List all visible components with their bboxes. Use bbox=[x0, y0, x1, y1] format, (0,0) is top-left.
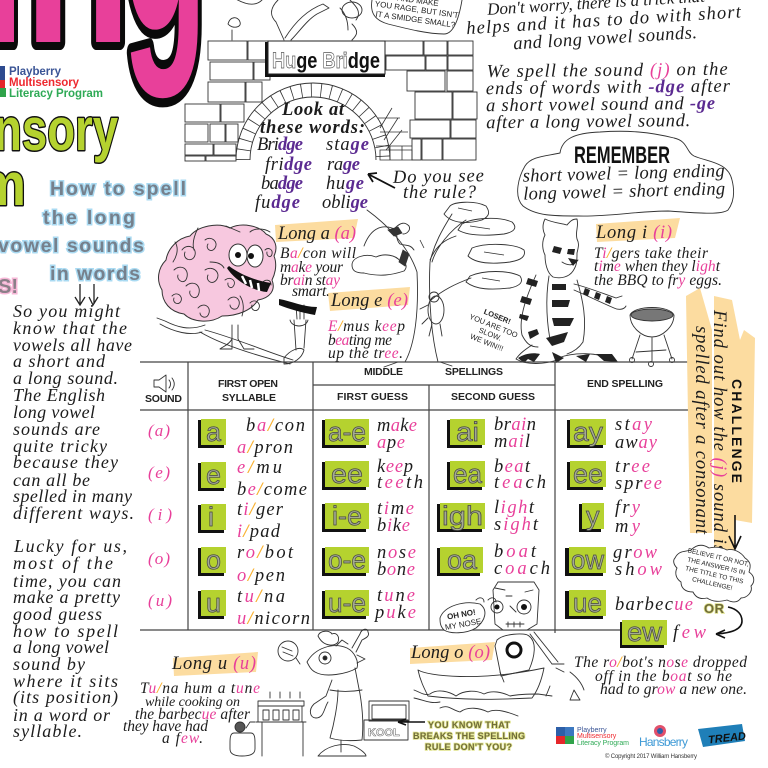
column: end spelling words: fry bbox=[615, 498, 641, 518]
text: you know that breaks the spelling rule bbox=[413, 720, 525, 752]
callout: believe it or not: BELIEVE IT OR NOT, bbox=[687, 547, 750, 568]
text: long a sentence: make your bbox=[280, 259, 344, 276]
text: look at these words: these words: bbox=[260, 118, 365, 138]
table header: sound bbox=[145, 375, 182, 405]
text: long a sentence: brain stay bbox=[280, 272, 340, 289]
table: spelling grid lines bbox=[140, 362, 690, 633]
column: second guess words: light bbox=[494, 498, 535, 518]
text: look at these words bbox=[260, 100, 365, 138]
column: first guess tiles bbox=[322, 417, 369, 619]
text: look at these words: Look at bbox=[281, 100, 345, 120]
column: first open syllable tiles: o bbox=[206, 545, 221, 575]
panel: challenge: spelled after a consonant bbox=[691, 326, 711, 535]
column: end spelling tiles: ow bbox=[571, 545, 604, 575]
illustration: stone bridge wall bbox=[185, 41, 477, 161]
column: sounds: (u) bbox=[148, 591, 172, 610]
callout: do you see the rule: Do you see bbox=[392, 166, 484, 188]
column: first guess tiles: ee bbox=[331, 459, 363, 489]
callout: remember: short vowel = long ending bbox=[522, 161, 725, 187]
panel: challenge: CHALLENGE bbox=[729, 379, 745, 483]
text block: intro paragraph: sounds are bbox=[13, 419, 100, 439]
column: first open syllable words: tu/na bbox=[237, 587, 285, 607]
logo: tread: TREAD bbox=[708, 731, 747, 746]
table header: sound: SOUND bbox=[145, 393, 182, 405]
text: long i sentence bbox=[594, 245, 722, 289]
column: second guess tiles: ea bbox=[453, 459, 483, 489]
title: green subheading letters bbox=[0, 97, 118, 219]
sign: Huge Bridge bbox=[265, 41, 385, 77]
column: sounds: (e) bbox=[148, 463, 170, 482]
column: end spelling tiles: ue bbox=[573, 588, 602, 618]
column: second guess words: teach bbox=[494, 473, 546, 493]
text: long u sentence: a few. bbox=[162, 730, 203, 747]
column: sounds bbox=[148, 421, 172, 610]
text block: don't worry bbox=[465, 0, 743, 57]
column: end spelling tiles: ay bbox=[573, 417, 604, 447]
text block: intro paragraph: quite tricky bbox=[13, 436, 107, 456]
column: second guess tiles: ai bbox=[456, 417, 479, 447]
column: first guess words: teeth bbox=[377, 473, 423, 493]
highlight band: long e bbox=[328, 287, 410, 311]
text block: the rule for j sound: after a long vowel sound. bbox=[486, 111, 690, 133]
panel: challenge bbox=[686, 288, 755, 552]
text: loser speech: SLOW. bbox=[478, 326, 503, 343]
logo: playberry small: Literacy Program bbox=[577, 740, 629, 747]
text block: the rule for j sound: We spell the sound (j) on the bbox=[487, 60, 728, 82]
text block: second paragraph: a long vowel bbox=[13, 637, 109, 657]
illustration: characters on the bridge bbox=[228, 0, 362, 40]
logo: tread bbox=[698, 724, 747, 747]
heading: how to spell the long vowel sounds in words: vowel sounds bbox=[0, 235, 144, 257]
highlight band: long u bbox=[173, 652, 258, 676]
column: end spelling tiles bbox=[565, 417, 606, 619]
column: first open syllable words: ba/con bbox=[246, 416, 305, 436]
column: first guess words: keep bbox=[377, 457, 413, 477]
illustration: robot head with thought bubble: OH NO! bbox=[446, 608, 476, 621]
column: end spelling words bbox=[613, 415, 693, 615]
illustration: robot head with thought bubble: MY NOSE bbox=[444, 617, 482, 632]
cat and foliage accents bbox=[388, 208, 504, 281]
column: second guess tiles bbox=[437, 417, 485, 576]
word lists: dge and ge words: oblige bbox=[322, 193, 368, 213]
word lists: dge and ge words: stage bbox=[326, 135, 369, 155]
table header: middle spellings bbox=[364, 366, 503, 378]
text block: second paragraph: sound by bbox=[13, 654, 85, 674]
illustration: kool esky cooler: KOOL bbox=[368, 727, 400, 739]
label: or: OR bbox=[704, 601, 725, 616]
text: long i sentence: time when they light bbox=[594, 258, 721, 275]
column: sounds: (o) bbox=[148, 549, 170, 568]
speech bubble: isn't it a smidge small bbox=[372, 0, 462, 34]
text: loser speech: LOSER! bbox=[482, 307, 512, 326]
column: second guess words bbox=[494, 415, 550, 579]
column: end spelling words: grow bbox=[613, 543, 658, 563]
text: long i sentence: Ti/gers take their bbox=[594, 245, 709, 262]
text: long u sentence: Tu/na hum a tune bbox=[140, 680, 260, 697]
column: end spelling words: my bbox=[615, 517, 641, 537]
column: second guess tiles: igh bbox=[442, 501, 483, 531]
sign: Huge Bridge: Huge Bridge bbox=[272, 48, 380, 73]
column: first guess words: bike bbox=[377, 516, 410, 536]
column: end spelling words: away bbox=[615, 433, 658, 453]
text: loser speech: WE WIN!!! bbox=[469, 332, 505, 353]
word lists: dge and ge words bbox=[255, 135, 369, 213]
callout: believe it or not: THE ANSWER IS IN bbox=[687, 557, 746, 577]
column: first guess tiles: a-e bbox=[328, 417, 366, 447]
text: long a sentence: smart. bbox=[292, 283, 330, 300]
text block: second paragraph bbox=[13, 536, 127, 741]
column: first guess words: puke bbox=[373, 603, 416, 623]
column: second guess words: boat bbox=[494, 542, 537, 562]
word lists: dge and ge words: fridge bbox=[265, 155, 312, 175]
illustration: kool esky cooler bbox=[364, 701, 425, 740]
heading: long o: Long o (o) bbox=[410, 643, 490, 663]
text: long o sentence: had to grow a new one. bbox=[600, 681, 747, 698]
text: you know that breaks the spelling rule: YOU KNOW THAT bbox=[428, 720, 510, 730]
text: long e sentence: E/mus keep bbox=[327, 318, 405, 335]
word lists: dge and ge words: Bridge bbox=[257, 135, 303, 155]
illustration: robot in boat bbox=[414, 632, 584, 716]
table header: second guess: SECOND GUESS bbox=[451, 391, 535, 403]
column: first guess words: ape bbox=[377, 433, 405, 453]
column: first guess tiles: u-e bbox=[328, 588, 366, 618]
heading: how to spell the long vowel sounds in words: the long bbox=[43, 207, 135, 229]
column: first open syllable words: a/pron bbox=[237, 438, 293, 458]
heading: how to spell the long vowel sounds in words bbox=[0, 178, 186, 285]
text block: the rule for j sound bbox=[486, 60, 731, 133]
text: you know that breaks the spelling rule: RULE DON'T YOU? bbox=[425, 742, 512, 752]
column: sounds: (a) bbox=[148, 421, 170, 440]
column: first open syllable words: u/nicorn bbox=[237, 609, 310, 629]
text: long e sentence bbox=[327, 318, 405, 362]
word lists: dge and ge words: fudge bbox=[255, 193, 300, 213]
column: first guess words: tune bbox=[377, 586, 415, 606]
table header: first open syllable: SYLLABLE bbox=[222, 392, 276, 404]
column: first open syllable tiles: e bbox=[206, 460, 221, 490]
column: second guess words: beat bbox=[494, 457, 531, 477]
word lists: dge and ge words: rage bbox=[327, 155, 360, 175]
column: first open syllable tiles: u bbox=[206, 588, 221, 618]
heading: how to spell the long vowel sounds in words: in words bbox=[50, 263, 140, 285]
column: end spelling words: spree bbox=[615, 474, 662, 494]
column: first guess words: bone bbox=[377, 560, 415, 580]
callout: believe it or not: CHALLENGE! bbox=[691, 576, 733, 592]
column: end spelling words: show bbox=[615, 560, 663, 580]
panel: challenge: Find out how the (j) sound is bbox=[709, 309, 729, 552]
text: you know that breaks the spelling rule: BREAKS THE SPELLING bbox=[413, 731, 525, 741]
logo: Playberry Multisensory Literacy Program: Literacy Program bbox=[9, 88, 103, 100]
text block: second paragraph: Lucky for us, bbox=[13, 536, 127, 556]
column: sounds: ( i ) bbox=[148, 505, 172, 524]
text block: second paragraph: syllable. bbox=[13, 721, 82, 741]
text: long e sentence: up the tree. bbox=[328, 345, 403, 362]
text block: intro paragraph: long vowel bbox=[13, 402, 95, 422]
callout: remember: long vowel = short ending bbox=[523, 179, 725, 205]
word: few: few bbox=[673, 623, 707, 643]
column: first open syllable tiles: i bbox=[208, 502, 214, 532]
callout: believe it or not: THE TITLE TO THIS bbox=[684, 565, 745, 586]
text: long o sentence: off in the boat so he bbox=[595, 668, 732, 685]
text: long o sentence bbox=[574, 654, 747, 698]
word lists: dge and ge words: huge bbox=[326, 174, 364, 194]
copyright: © Copyright 2017 William Hansberry bbox=[605, 753, 697, 760]
text block: intro paragraph: can all be bbox=[13, 470, 90, 490]
text block: second paragraph: make a pretty bbox=[13, 587, 120, 607]
column: first guess words bbox=[373, 416, 423, 623]
column: end spelling tiles: y bbox=[586, 501, 600, 531]
logo: playberry small bbox=[556, 727, 629, 747]
tile: ew: ew bbox=[627, 617, 663, 647]
heading: how to spell the long vowel sounds in words: How to spell bbox=[50, 178, 186, 200]
column: first open syllable words: i/pad bbox=[237, 522, 281, 542]
callout: do you see the rule bbox=[368, 166, 484, 203]
callout: believe it or not bbox=[674, 545, 754, 602]
logo: Playberry Multisensory Literacy Program: Multisensory bbox=[9, 77, 80, 89]
illustration: robot head with thought bubble bbox=[440, 582, 539, 633]
text: long o sentence: The ro/bot's nose dropped bbox=[574, 654, 747, 671]
logo: playberry small: Playberry bbox=[577, 727, 607, 734]
text: long u sentence: they have had bbox=[123, 718, 208, 735]
text block: intro paragraph: spelled in many bbox=[13, 486, 132, 506]
column: first open syllable words bbox=[237, 416, 310, 629]
text block: second paragraph: most of the bbox=[13, 553, 113, 573]
highlight band: long a bbox=[275, 219, 358, 242]
text: long i sentence: the BBQ to fry eggs. bbox=[594, 272, 722, 289]
logo: hansberry bbox=[639, 725, 688, 749]
illustration: smiling brain with fork bbox=[157, 225, 317, 364]
logo: playberry small: Multisensory bbox=[577, 733, 617, 740]
column: first guess words: make bbox=[377, 416, 417, 436]
column: second guess words: brain bbox=[494, 415, 536, 435]
heading: long e: Long e (e) bbox=[330, 291, 408, 311]
column: end spelling words: barbecue bbox=[615, 595, 693, 615]
speech bubble: isn't it a smidge small: IT A SMIDGE SMALL? bbox=[375, 10, 456, 30]
table header: end spelling: END SPELLING bbox=[587, 378, 663, 390]
column: first open syllable words: o/pen bbox=[237, 566, 285, 586]
tiger stripes and face bbox=[518, 246, 618, 363]
text block: intro paragraph bbox=[13, 301, 134, 523]
title: pink headline letters bbox=[0, 0, 208, 102]
column: second guess words: sight bbox=[494, 515, 539, 535]
text block: intro paragraph: So you might bbox=[13, 301, 121, 321]
word lists: dge and ge words: badge bbox=[261, 174, 303, 194]
logo: Playberry Multisensory Literacy Program bbox=[0, 66, 103, 100]
logo: hansberry: Hansberry bbox=[639, 735, 688, 749]
text block: second paragraph: time, you can bbox=[13, 571, 121, 591]
text block: don't worry: helps and it has to do with short bbox=[466, 2, 742, 39]
logo: Playberry Multisensory Literacy Program: Playberry bbox=[9, 66, 62, 78]
column: second guess words: mail bbox=[494, 432, 530, 452]
table header: first open syllable bbox=[218, 378, 278, 404]
text block: intro paragraph: a short and bbox=[13, 351, 106, 371]
text block: the rule for j sound: a short vowel sound and -ge bbox=[486, 94, 715, 116]
column: first open syllable words: ro/bot bbox=[237, 543, 294, 563]
text block: intro paragraph: because they bbox=[13, 452, 118, 472]
callout: remember bbox=[518, 131, 734, 216]
table header: first open syllable: FIRST OPEN bbox=[218, 378, 278, 390]
heading: long a: Long a (a) bbox=[277, 224, 356, 244]
heading: long u: Long u (u) bbox=[171, 654, 256, 674]
arrow: or to few bbox=[716, 607, 742, 638]
illustration: barbecue grill bbox=[630, 308, 674, 366]
column: second guess tiles: oa bbox=[447, 545, 478, 575]
table header: first guess: FIRST GUESS bbox=[337, 391, 408, 403]
column: first open syllable words: be/come bbox=[237, 480, 307, 500]
text block: don't worry: and long vowel sounds. bbox=[513, 23, 698, 54]
highlight band: long i bbox=[596, 218, 680, 242]
text: long a sentence: Ba/con will bbox=[280, 245, 356, 262]
text: long u sentence: while cooking on bbox=[145, 695, 240, 710]
text block: second paragraph: (its position) bbox=[13, 687, 118, 708]
callout: remember: REMEMBER bbox=[574, 142, 670, 169]
column: first guess tiles: o-e bbox=[328, 545, 366, 575]
arch stones bbox=[236, 83, 412, 160]
text block: second paragraph: good guess bbox=[13, 604, 102, 624]
text block: second paragraph: how to spell bbox=[13, 621, 118, 641]
text: long a sentence bbox=[280, 245, 356, 300]
text: long u sentence bbox=[123, 680, 260, 747]
text: loser speech bbox=[461, 303, 523, 356]
text block: intro paragraph: know that the bbox=[13, 318, 127, 338]
column: first guess words: nose bbox=[377, 543, 416, 563]
illustration: tiger bbox=[516, 219, 626, 364]
text: loser speech: YOU ARE TOO bbox=[468, 312, 519, 340]
text block: the rule for j sound: ends of words with -dge after bbox=[486, 77, 731, 99]
column: first open syllable words: e/mu bbox=[237, 458, 282, 478]
table header: middle spellings: MIDDLE bbox=[364, 366, 403, 378]
column: first open syllable tiles bbox=[198, 417, 226, 619]
column: first open syllable tiles: a bbox=[206, 417, 222, 447]
column: end spelling words: tree bbox=[615, 457, 650, 477]
column: end spelling tiles: ee bbox=[573, 459, 603, 489]
highlight band: long o bbox=[410, 642, 495, 664]
column: second guess words: coach bbox=[494, 559, 550, 579]
callout: do you see the rule: the rule? bbox=[403, 183, 477, 203]
arrows pointing to intro text bbox=[75, 284, 98, 305]
text block: second paragraph: in a word or bbox=[13, 705, 111, 725]
text block: intro paragraph: vowels all have bbox=[13, 335, 132, 355]
illustration: tree with cat and runner bbox=[352, 202, 524, 367]
text: long e sentence: beating me bbox=[328, 332, 392, 349]
text block: intro paragraph: The English bbox=[13, 385, 105, 405]
table header: middle spellings: SPELLINGS bbox=[445, 366, 503, 378]
column: end spelling words: stay bbox=[615, 415, 653, 435]
illustration: tuna chef with barbecue bbox=[230, 629, 369, 756]
heading: long i: Long i (i) bbox=[595, 223, 672, 243]
text: long u sentence: the barbecue after bbox=[135, 706, 251, 723]
text block: intro paragraph: different ways. bbox=[13, 503, 134, 523]
column: first guess tiles: i-e bbox=[332, 501, 362, 531]
column: first guess words: time bbox=[377, 499, 414, 519]
text block: intro paragraph: a long sound. bbox=[13, 368, 118, 388]
column: first open syllable words: ti/ger bbox=[237, 500, 284, 520]
text block: second paragraph: where it sits bbox=[13, 671, 118, 691]
